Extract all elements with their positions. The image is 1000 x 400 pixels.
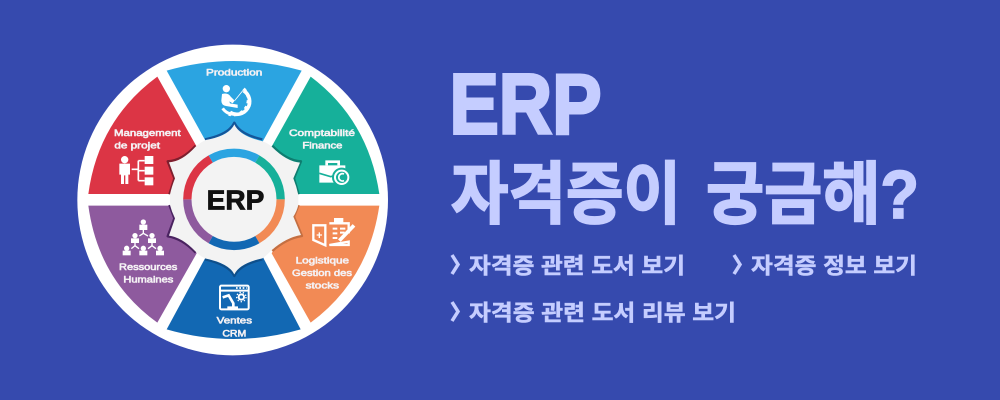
heading: 자격증이 궁금해?: 궁금해? (706, 157, 919, 233)
panel: Ventes CRM: CRM (222, 328, 246, 338)
icon: briefcase and coin (319, 162, 351, 187)
panel: Comptabilité Finance: Finance (302, 141, 342, 151)
panel: Comptabilité Finance (272, 77, 379, 194)
icon: worker and gear (221, 85, 250, 115)
ring segments (187, 153, 281, 246)
icon: browser window with robot arm (220, 286, 249, 309)
icon: person and org blocks (119, 156, 153, 185)
panel: Production (167, 61, 302, 142)
icon: clipboard, binder and pencil (313, 218, 354, 245)
icon: chevron (452, 302, 458, 321)
gear edge shadows (168, 123, 302, 276)
panel: Management de projet: de projet (114, 141, 160, 151)
panel: Management de projet: Management (114, 128, 181, 138)
panel: Production: Production (206, 68, 262, 78)
panel: Management de projet (88, 77, 197, 194)
label: ERP: ERP (207, 184, 264, 215)
panel: Ressources Humaines: Ressources (119, 262, 178, 272)
icon: chevron (452, 255, 458, 274)
central gear (168, 123, 302, 276)
panel: Logistique Gestion des stocks: Logistique (296, 255, 349, 265)
icon: chevron (734, 255, 740, 274)
ERP wheel diagram (77, 45, 388, 355)
link: 자격증 관련 도서 리뷰 보기: 자격증 관련 도서 리뷰 보기 (469, 300, 736, 326)
link: 자격증 관련 도서 보기: 자격증 관련 도서 보기 (469, 254, 685, 278)
panel: Logistique Gestion des stocks: Gestion des (292, 268, 352, 278)
gear body (169, 124, 301, 274)
panel: Ressources Humaines (88, 206, 197, 323)
panel: Comptabilité Finance: Comptabilité (289, 128, 355, 138)
panel: Ressources Humaines: Humaines (123, 275, 174, 285)
panel: Ventes CRM (167, 257, 301, 339)
panel: Logistique Gestion des stocks (272, 206, 379, 323)
heading: ERP: ERP (450, 58, 602, 152)
panel: Ventes CRM: Ventes (217, 316, 252, 326)
heading: 자격증이 궁금해?: 자격증이 (451, 157, 681, 233)
link: 자격증 정보 보기: 자격증 정보 보기 (751, 254, 917, 278)
panel: Logistique Gestion des stocks: stocks (306, 281, 339, 291)
icon: people hierarchy (123, 219, 164, 255)
heading: 자격증이 궁금해? (451, 157, 919, 233)
